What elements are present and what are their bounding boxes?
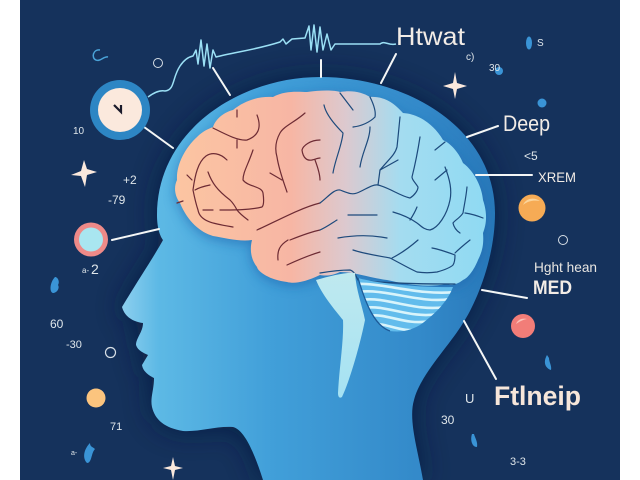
scattered numbers: U [465,391,474,406]
scattered numbers: -30 [66,339,82,351]
label: Ftlneip: Ftlneip [494,381,581,411]
cerebellum [355,278,455,331]
scattered numbers: 10 [73,126,85,137]
icon: ring right [558,236,568,244]
scattered numbers: +2 [123,173,137,187]
scattered numbers: c) [466,52,474,63]
blue doodles [51,36,551,463]
scattered numbers [50,38,544,468]
icon: star top right [443,72,467,99]
brainstem [316,273,365,398]
icon: orange sphere [518,194,546,222]
head shadow [122,77,495,480]
brain [175,90,486,286]
icon: star bottom [163,457,183,480]
label: Deep: Deep [503,111,550,136]
icon: star left [71,160,97,187]
icon: peach dot [86,388,106,408]
brain shadow [175,94,486,289]
label: MED: MED [533,278,572,299]
scattered numbers: 3-3 [510,456,526,468]
icon: pink circle with blue centre [74,222,108,256]
scattered numbers: 2 [91,261,99,277]
brain: right folds [320,93,483,284]
icon: ring near top [154,58,162,68]
scattered numbers: 30 [441,413,455,427]
scattered numbers: <5 [524,149,538,163]
pointer lines [112,54,532,379]
scattered numbers: 71 [110,421,122,433]
icon: coral sphere [511,314,535,338]
label: Hght hean: Hght hean [534,259,597,275]
squiggle: top left [93,50,108,60]
title label: Htwat: Htwat [396,23,465,51]
brain: cerebrum [175,90,486,286]
icon: clock [90,80,150,140]
scattered numbers: 60 [50,317,64,331]
scattered numbers: a- [82,266,89,275]
head silhouette [122,77,495,480]
scattered numbers: -79 [108,193,126,207]
label: XREM: XREM [538,169,576,185]
icon: small ring [106,348,116,358]
scattered numbers: a- [71,450,78,457]
brain wave line [148,25,396,97]
scattered numbers: 30 [489,63,501,74]
brain: left folds [177,110,320,265]
scattered numbers: S [537,38,544,49]
